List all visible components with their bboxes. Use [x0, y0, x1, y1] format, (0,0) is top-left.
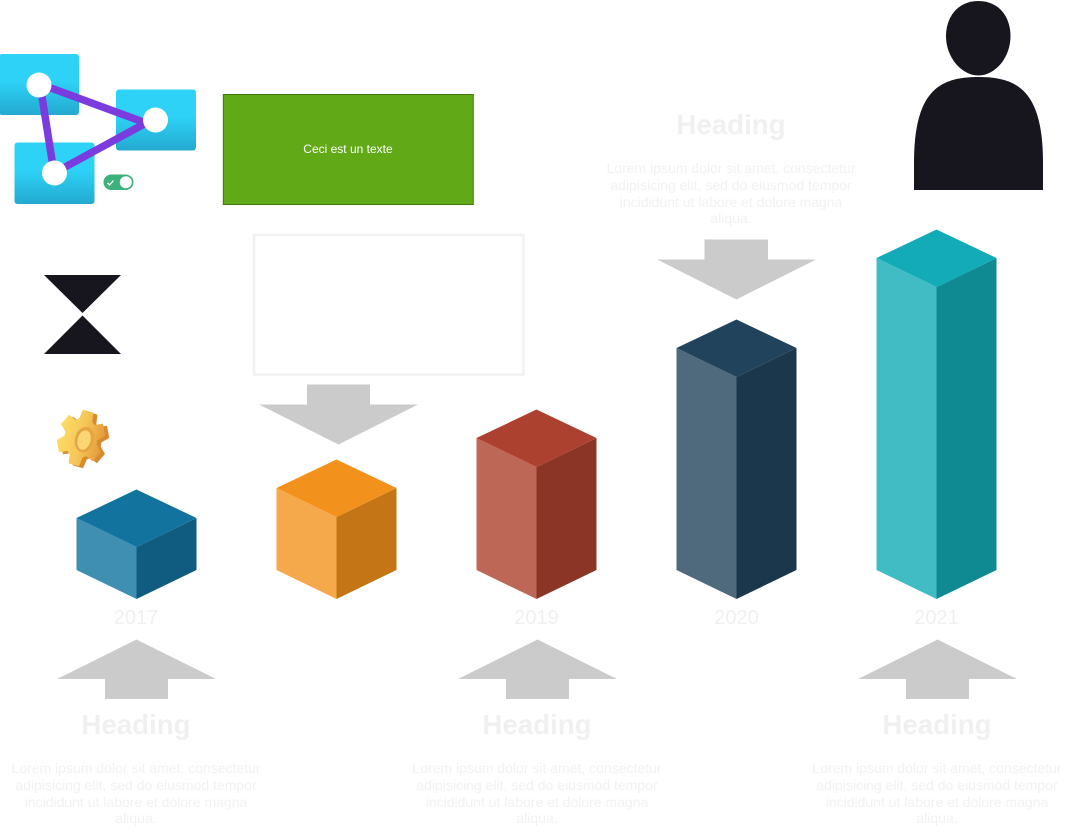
arrow down 2020	[657, 240, 816, 300]
text block 2017: Heading	[81, 709, 191, 740]
text block 2019: adipisicing elit, sed do eiusmod tempor	[416, 777, 658, 793]
text block 2021: Lorem ipsum dolor sit amet, consectetur	[812, 760, 1062, 776]
bar 2020	[676, 320, 796, 599]
text block 2017: aliqua.	[115, 810, 157, 826]
text block 2020: incididunt ut labore et dolore magna	[620, 194, 843, 210]
text block 2021	[812, 709, 1062, 826]
year labels: 2019	[514, 607, 559, 629]
text block 2019: Lorem ipsum dolor sit amet, consectetur	[412, 760, 662, 776]
card: bottom left	[14, 142, 94, 204]
text block 2020: Heading	[676, 109, 786, 140]
card: top left	[0, 54, 79, 115]
text block 2021: incididunt ut labore et dolore magna	[826, 794, 1049, 810]
text block 2019	[412, 709, 662, 826]
text block 2020: adipisicing elit, sed do eiusmod tempor	[610, 177, 852, 193]
bar 2018	[276, 460, 396, 599]
year labels: 2021	[914, 607, 959, 629]
text block 2020: Lorem ipsum dolor sit amet, consectetur	[606, 160, 856, 176]
network links	[40, 84, 146, 173]
toggle switch	[104, 174, 134, 190]
text block 2019: Heading	[482, 709, 592, 740]
person icon	[914, 1, 1043, 190]
arrow down 2018	[259, 384, 418, 444]
year labels: 2017	[114, 607, 158, 629]
text block 2017: incididunt ut labore et dolore magna	[25, 794, 248, 810]
arrow up 2017	[57, 640, 216, 699]
text block 2019: aliqua.	[516, 810, 558, 826]
text block 2021: Heading	[882, 709, 992, 740]
card: right	[116, 90, 196, 150]
hourglass icon	[44, 275, 121, 354]
text block 2017: Lorem ipsum dolor sit amet, consectetur	[12, 760, 261, 776]
green text box: Ceci est un texte	[303, 142, 393, 156]
text block 2019: incididunt ut labore et dolore magna	[426, 794, 649, 810]
empty outlined box	[254, 235, 524, 374]
text block 2017: adipisicing elit, sed do eiusmod tempor	[15, 777, 257, 793]
bar 2017	[76, 490, 196, 599]
text block 2017	[12, 709, 261, 826]
green text box	[223, 94, 473, 204]
bar 2021	[876, 230, 996, 599]
text block 2020	[606, 109, 856, 226]
text block 2021: aliqua.	[916, 810, 958, 826]
arrow up 2019	[458, 640, 617, 699]
year labels: 2020	[714, 607, 759, 629]
text block 2021: adipisicing elit, sed do eiusmod tempor	[816, 777, 1058, 793]
gear icon	[52, 405, 114, 473]
bar 2019	[476, 410, 596, 599]
arrow up 2021	[858, 640, 1017, 699]
text block 2020: aliqua.	[710, 210, 752, 226]
network diagram icon	[0, 54, 196, 204]
network nodes	[26, 72, 168, 186]
year labels	[114, 607, 959, 629]
